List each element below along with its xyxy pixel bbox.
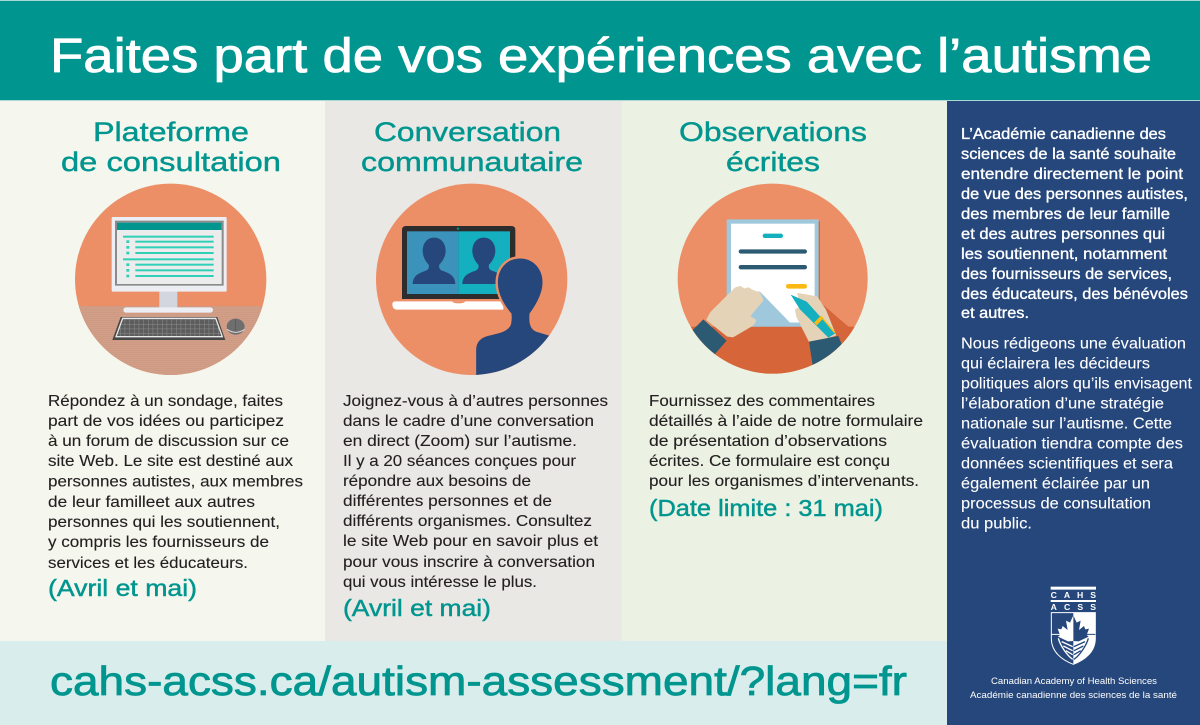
- logo: cahs acss shield: [1051, 587, 1096, 664]
- panel: conversation communautaire: [325, 101, 622, 641]
- text: second paragraph: nationale sur l’autisme. Cette: [961, 416, 1172, 432]
- body text: conversation: différentes personnes et de: [343, 493, 552, 510]
- text: organisation names: [970, 676, 1177, 701]
- heading: conversation communautaire: [361, 117, 583, 177]
- body text: conversation: [343, 393, 608, 591]
- body text: conversation: en direct (Zoom) sur l’autisme.: [343, 433, 577, 450]
- body text: conversation: pour vous inscrire à conversation: [343, 554, 595, 571]
- body text: observations: détaillés à l’aide de notre formulaire: [649, 413, 923, 430]
- body text: plateforme: services et les éducateurs.: [48, 555, 248, 572]
- text: second paragraph: qui éclairera les décideurs: [961, 356, 1150, 372]
- heading: plateforme de consultation: de consultation: [61, 147, 281, 177]
- body text: conversation: Il y a 20 séances conçues pour: [343, 453, 577, 470]
- body text: plateforme: y compris les fournisseurs de: [48, 534, 269, 551]
- body text: conversation: le site Web pour en savoir plus et: [343, 533, 599, 550]
- body text: plateforme: site Web. Le site est destiné aux: [48, 453, 293, 470]
- text: organisation names: Académie canadienne des sciences de la santé: [970, 690, 1177, 701]
- body text: observations: pour les organismes d’intervenants.: [649, 473, 919, 490]
- date: avril et mai: (Avril et mai): [48, 575, 197, 601]
- body text: conversation: dans le cadre d’une conversation: [343, 413, 594, 430]
- body text: observations: [649, 393, 923, 490]
- text: first paragraph: sciences de la santé souhaite: [961, 146, 1176, 163]
- header banner: [0, 1, 1200, 100]
- text: second paragraph: [961, 336, 1193, 532]
- body text: plateforme: part de vos idées ou participez: [48, 413, 284, 430]
- body text: observations: Fournissez des commentaires: [649, 393, 875, 410]
- text: second paragraph: Nous rédigeons une évaluation: [961, 336, 1186, 352]
- panel: plateforme de consultation: [0, 101, 325, 641]
- panel: observations écrites: [622, 101, 947, 641]
- text: first paragraph: et autres.: [961, 305, 1029, 322]
- heading: observations écrites: Observations: [679, 117, 867, 147]
- text: first paragraph: des membres de leur famille: [961, 206, 1170, 223]
- text: second paragraph: du public.: [961, 516, 1032, 532]
- body text: conversation: différents organismes. Consultez: [343, 513, 592, 530]
- heading: plateforme de consultation: [61, 117, 281, 177]
- logo: cahs acss shield: ACSS: [1051, 602, 1096, 612]
- text: second paragraph: politiques alors qu’ils envisagent: [961, 376, 1193, 392]
- text: first paragraph: des fournisseurs de services,: [961, 266, 1172, 283]
- text: first paragraph: les soutiennent, notamment: [961, 246, 1168, 263]
- heading: observations écrites: écrites: [726, 147, 820, 177]
- banner: web address: [0, 641, 947, 725]
- body text: plateforme: [48, 393, 303, 572]
- icon: video call: [376, 184, 573, 383]
- body text: plateforme: de leur familleet aux autres: [48, 494, 255, 511]
- icon: hands writing on a form: [673, 184, 873, 380]
- icon: desktop computer: [70, 184, 277, 379]
- body text: plateforme: à un forum de discussion sur ce: [48, 433, 289, 450]
- date: avril et mai: (Avril et mai): [343, 595, 491, 621]
- heading: plateforme de consultation: Plateforme: [93, 117, 249, 147]
- heading: observations écrites: [679, 117, 867, 177]
- text: first paragraph: [961, 126, 1188, 322]
- text: first paragraph: de vue des personnes autistes,: [961, 186, 1188, 203]
- text: first paragraph: des éducateurs, des bénévoles: [961, 286, 1188, 303]
- body text: observations: écrites. Ce formulaire est conçu: [649, 453, 890, 470]
- heading: conversation communautaire: Conversation: [374, 117, 561, 147]
- body text: conversation: Joignez-vous à d’autres personnes: [343, 393, 608, 410]
- text: second paragraph: processus de consultation: [961, 496, 1151, 512]
- title: Faites part de vos expériences avec l’autisme: [50, 30, 1152, 83]
- body text: plateforme: personnes autistes, aux membres: [48, 474, 303, 490]
- text: organisation names: Canadian Academy of Health Sciences: [991, 676, 1157, 687]
- logo: cahs acss shield: CAHS: [1051, 590, 1096, 600]
- url: cahs-acss.ca/autism-assessment/?lang=fr: [50, 658, 907, 704]
- date: date limite: (Date limite : 31 mai): [649, 495, 883, 521]
- text: first paragraph: L’Académie canadienne des: [961, 126, 1166, 143]
- panel: sidebar: [947, 101, 1200, 725]
- text: second paragraph: également éclairée par un: [961, 476, 1150, 492]
- body text: conversation: répondre aux besoins de: [343, 473, 531, 490]
- text: second paragraph: données scientifiques et sera: [961, 456, 1173, 472]
- text: first paragraph: entendre directement le point: [961, 166, 1184, 183]
- heading: conversation communautaire: communautaire: [361, 147, 583, 177]
- body text: conversation: qui vous intéresse le plus.: [343, 574, 537, 591]
- text: second paragraph: l’élaboration d’une stratégie: [961, 396, 1164, 412]
- text: first paragraph: et des autres personnes qui: [961, 226, 1165, 243]
- body text: plateforme: Répondez à un sondage, faites: [48, 393, 283, 410]
- body text: observations: de présentation d’observations: [649, 433, 887, 450]
- body text: plateforme: personnes qui les soutiennent,: [48, 514, 280, 531]
- text: second paragraph: évaluation tiendra compte des: [961, 436, 1183, 452]
